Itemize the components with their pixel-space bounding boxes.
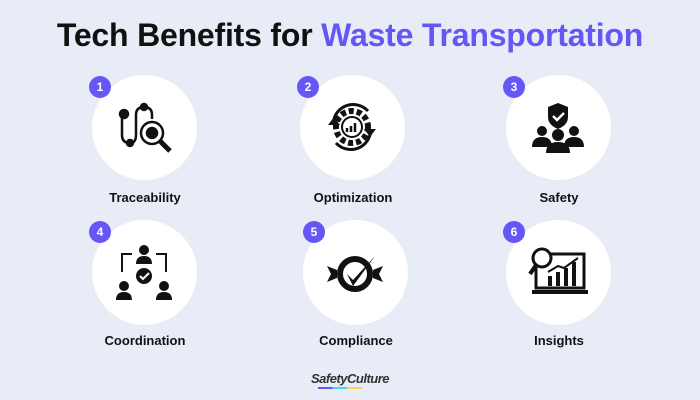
label: Insights	[534, 333, 584, 348]
label: Coordination	[105, 333, 185, 348]
label: Safety	[539, 190, 579, 205]
badge 5	[303, 221, 325, 243]
badge 4: 4	[97, 225, 103, 239]
icon: coordination	[92, 220, 197, 325]
badge 1: 1	[97, 80, 103, 94]
icon: optimization	[300, 75, 405, 180]
badge 6	[503, 221, 525, 243]
badge 3	[503, 76, 525, 98]
panel: insights	[503, 220, 611, 348]
panel: coordination	[89, 220, 197, 348]
label: Compliance	[319, 333, 393, 348]
panel: compliance	[303, 220, 408, 348]
icon: safety	[506, 75, 611, 180]
icon: traceability	[92, 75, 197, 180]
badge 2: 2	[305, 80, 311, 94]
badge 3: 3	[511, 80, 517, 94]
label: Traceability	[109, 190, 181, 205]
icon: insights	[506, 220, 611, 325]
panel: traceability	[89, 75, 197, 205]
badge 6: 6	[511, 225, 517, 239]
logo: SafetyCulture	[311, 371, 389, 386]
badge 4	[89, 221, 111, 243]
label: Optimization	[314, 190, 392, 205]
panel: optimization	[297, 75, 405, 205]
icon: compliance	[303, 220, 408, 325]
title: Tech Benefits for Waste Transportation	[57, 17, 643, 53]
panel: safety	[503, 75, 611, 205]
badge 1	[89, 76, 111, 98]
badge 5: 5	[311, 225, 317, 239]
badge 2	[297, 76, 319, 98]
